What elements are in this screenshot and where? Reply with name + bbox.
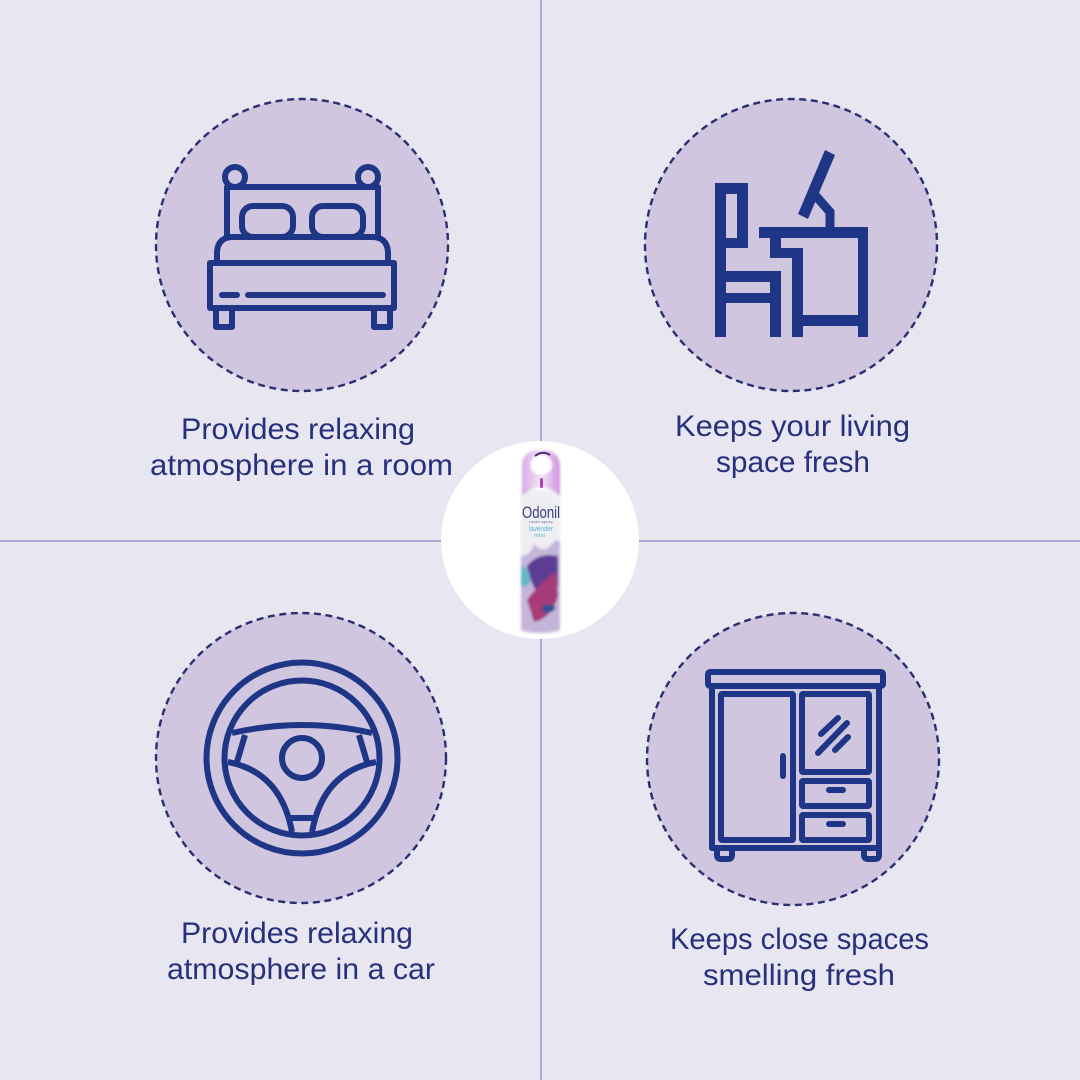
heading: closed spaces: Keeps close spaces (670, 923, 929, 956)
circle: bedroom (156, 99, 448, 391)
circle: living space (645, 99, 937, 391)
white circle (441, 441, 639, 639)
bottle label: mist (534, 533, 546, 539)
icon: bed (210, 167, 394, 327)
heading: closed spaces (670, 923, 929, 992)
icon: desk and chair (715, 150, 868, 337)
center badge: product (441, 441, 639, 639)
spray bottle (521, 449, 560, 633)
heading: car: Provides relaxing (181, 917, 413, 950)
icon: steering wheel (206, 662, 398, 854)
bottle label: Odonil (522, 503, 560, 522)
panel: living space (645, 99, 937, 479)
panel: closed spaces (647, 613, 939, 992)
heading: car: atmosphere in a car (167, 953, 435, 986)
icon: wardrobe (708, 672, 883, 859)
bottle label: room spray (529, 519, 553, 524)
bottle label (522, 503, 560, 539)
heading: bedroom: atmosphere in a room (150, 449, 453, 482)
panel: car (156, 613, 446, 986)
circle: car (156, 613, 446, 903)
heading: living space: space fresh (716, 446, 870, 479)
heading: bedroom: Provides relaxing (181, 413, 415, 446)
heading: living space (675, 410, 910, 479)
heading: closed spaces: smelling fresh (703, 959, 895, 992)
heading: living space: Keeps your living (675, 410, 910, 443)
panel: bedroom (150, 99, 453, 482)
heading: car (167, 917, 435, 986)
circle: closed spaces (647, 613, 939, 905)
bottle label: lavender (529, 526, 554, 533)
heading: bedroom (150, 413, 453, 482)
